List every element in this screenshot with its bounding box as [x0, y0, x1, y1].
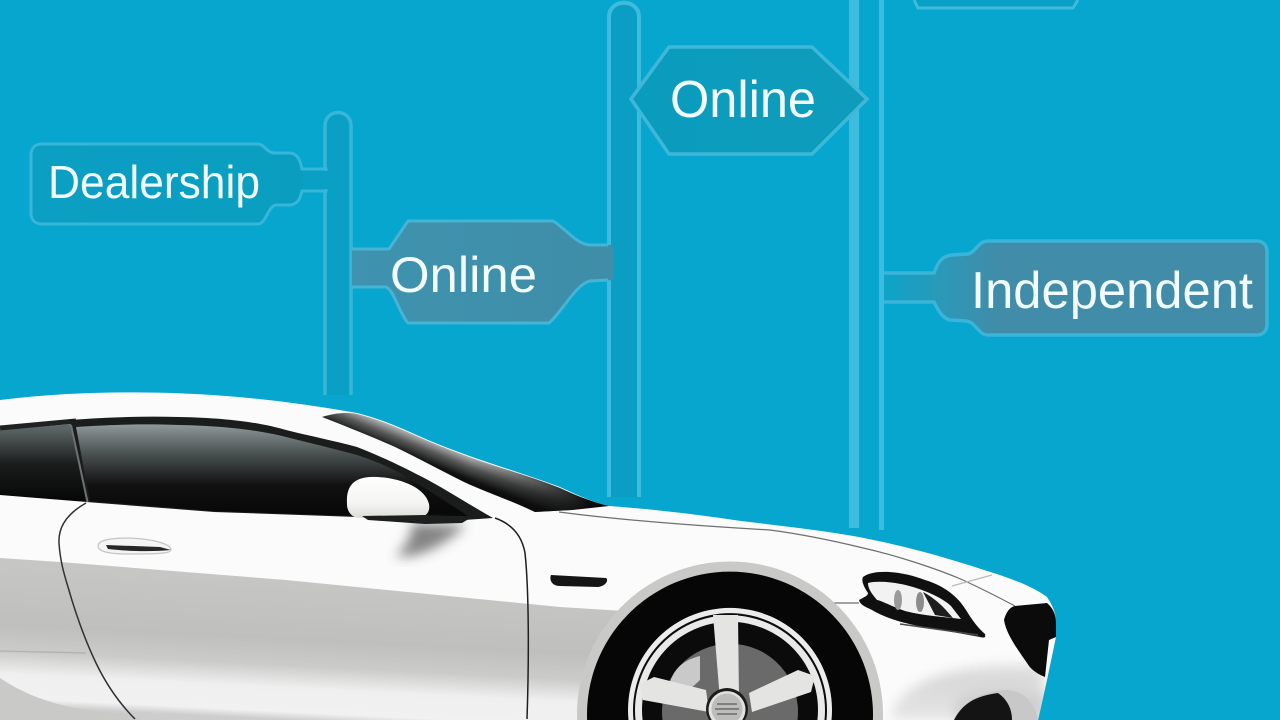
- mirror shadow: [395, 523, 466, 557]
- door handle: [98, 538, 171, 554]
- rim: [628, 608, 832, 720]
- sign: Independent: Independent: [971, 262, 1254, 320]
- front air intake: [954, 690, 1038, 720]
- mirror arm: [362, 515, 472, 524]
- front wheel: [577, 561, 883, 720]
- window trim: [70, 417, 493, 520]
- windshield: [322, 413, 609, 512]
- grille: [1004, 603, 1056, 677]
- rear side window: [0, 424, 87, 502]
- door outline: [59, 503, 135, 719]
- sign: Online upper: Online: [670, 71, 816, 129]
- window pillar: [71, 425, 88, 502]
- sign: top cropped: [914, 0, 1078, 8]
- sign: Dealership: Dealership: [48, 156, 260, 208]
- car: [0, 392, 1056, 720]
- body side shading: [0, 558, 1050, 720]
- side mirror: [347, 477, 429, 518]
- brake caliper: [668, 656, 700, 692]
- sign: Online upper: [631, 47, 867, 154]
- car body: [0, 392, 1056, 720]
- hub: [706, 688, 748, 720]
- sign: Online lower: [352, 221, 614, 323]
- signpost structure: [31, 0, 1267, 530]
- rear window trim: [0, 421, 76, 428]
- tyre: [587, 572, 873, 720]
- post 3: [849, 0, 884, 530]
- spokes: [640, 615, 815, 712]
- sign: Independent: [884, 241, 1267, 335]
- headlight: [859, 572, 985, 638]
- hood lines: [559, 512, 1015, 606]
- post 2: [609, 3, 639, 497]
- side vent: [550, 575, 607, 587]
- brake disc: [662, 644, 798, 720]
- front side glass: [76, 424, 468, 516]
- post 1: [325, 112, 351, 395]
- sign: Online lower: Online: [390, 247, 537, 303]
- sign: Dealership: [31, 144, 329, 224]
- wheel arch: [577, 561, 883, 720]
